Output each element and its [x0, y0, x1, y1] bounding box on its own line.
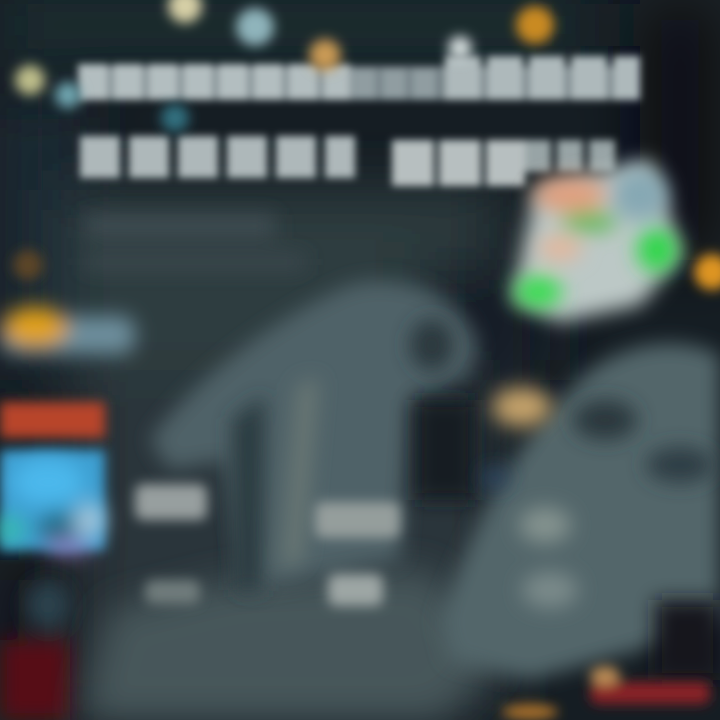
panel: left gauge [0, 402, 105, 554]
labels: pale text patches [135, 484, 400, 606]
icon: right orange dot [13, 250, 720, 290]
icons: top row dots [15, 0, 554, 132]
illustration: grey blob right [440, 344, 720, 680]
illustration: grey hooded figure [80, 281, 500, 720]
chart: multicolour blob [512, 160, 682, 322]
panel: bottom left dark red [0, 581, 70, 720]
icon: amber glow [481, 387, 552, 488]
subtitle: faint text block [85, 215, 305, 269]
panel: left orange and blue band [0, 307, 135, 354]
title: blurred headline [78, 66, 640, 163]
panel: bottom right red and amber [502, 666, 710, 720]
